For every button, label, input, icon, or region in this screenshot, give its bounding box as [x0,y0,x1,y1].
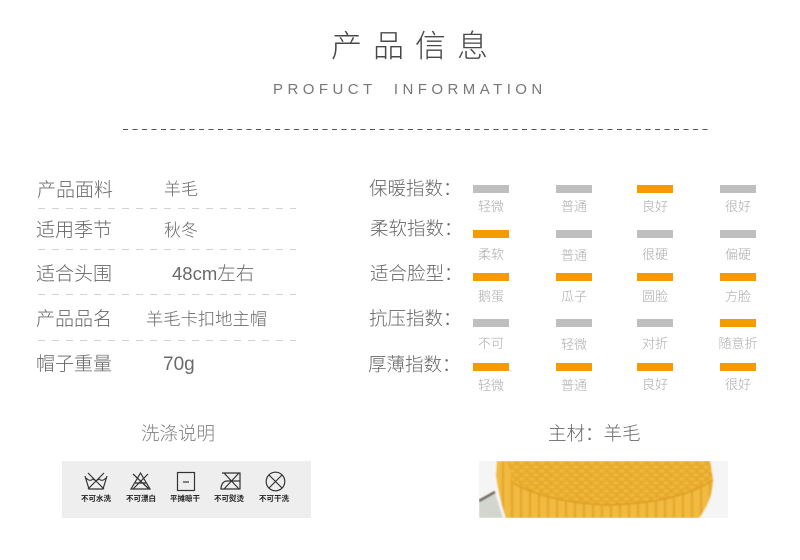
row: softness bars: 柔软 [478,247,504,262]
caption: do not bleach: 不可漂白 [126,494,156,503]
value: fabric: 羊毛 [164,180,198,199]
caption: do not dry clean: 不可干洗 [259,494,289,503]
icon: dry flat [178,472,194,490]
row: softness bars: 偏硬 [725,247,751,262]
row: thickness bars: 良好 [642,377,668,392]
row: warmth bars [473,185,756,214]
icon: do not iron [221,473,240,489]
panel: care icons [62,461,311,518]
label: weight: 帽子重量 [36,354,112,375]
row label: softness: 柔软指数： [370,218,463,239]
heading: washing instructions: 洗涤说明 [141,423,215,444]
icon: do not bleach [131,473,150,489]
hat crown and ribbed brim [496,461,713,518]
row label: warmth: 保暖指数： [369,178,462,199]
row: warmth bars: 轻微 [478,199,504,214]
row: pressure resistance bars: 轻微 [561,337,587,352]
row: thickness bars: 轻微 [478,378,504,393]
row: thickness bars [473,363,756,393]
caption: dry flat: 平摊晾干 [170,494,200,503]
value: product name: 羊毛卡扣地主帽 [146,309,267,329]
heading: main material: 主材：羊毛 [548,423,641,444]
label: season: 适用季节 [36,220,112,241]
icon: do not wash [85,473,107,489]
value: season: 秋冬 [164,221,198,240]
row label: thickness: 厚薄指数： [368,354,461,375]
row: softness bars: 很硬 [642,247,668,262]
value: weight: 70g [163,354,195,375]
row: pressure resistance bars: 对折 [642,336,668,351]
label: fabric: 产品面料 [37,180,113,201]
row label: face shape: 适合脸型： [370,263,463,284]
row: face shape bars: 圆脸 [642,289,668,304]
row: pressure resistance bars [473,319,758,352]
row: face shape bars: 方脸 [725,289,751,304]
caption: do not iron: 不可熨烫 [214,494,244,503]
row: thickness bars: 普通 [561,378,587,393]
row: pressure resistance bars: 随意折 [718,336,758,351]
label: product name: 产品品名 [36,309,112,330]
row: thickness bars: 很好 [725,377,751,392]
row: warmth bars: 普通 [561,199,587,214]
image: yellow knit hat [479,461,728,518]
row: face shape bars [473,273,756,304]
row label: pressure resistance: 抗压指数： [369,308,462,329]
row: face shape bars: 瓜子 [561,289,587,304]
row: pressure resistance bars: 不可 [478,336,504,351]
row: face shape bars: 鹅蛋 [478,289,504,304]
title: 产品信息 [331,29,499,64]
row: softness bars: 普通 [561,248,587,263]
label: head size: 适合头围 [36,264,112,285]
panel: product indices [368,178,758,393]
photo backdrop details [479,461,713,518]
value: head size: 48cm左右 [172,263,254,284]
row: warmth bars: 良好 [642,199,668,214]
row: warmth bars: 很好 [725,199,751,214]
row: softness bars [473,230,756,263]
icon: do not dry clean [266,472,285,491]
caption: do not wash: 不可水洗 [81,494,111,503]
subtitle: PROFUCT INFORMATION [273,81,547,98]
panel: product details [36,180,296,375]
